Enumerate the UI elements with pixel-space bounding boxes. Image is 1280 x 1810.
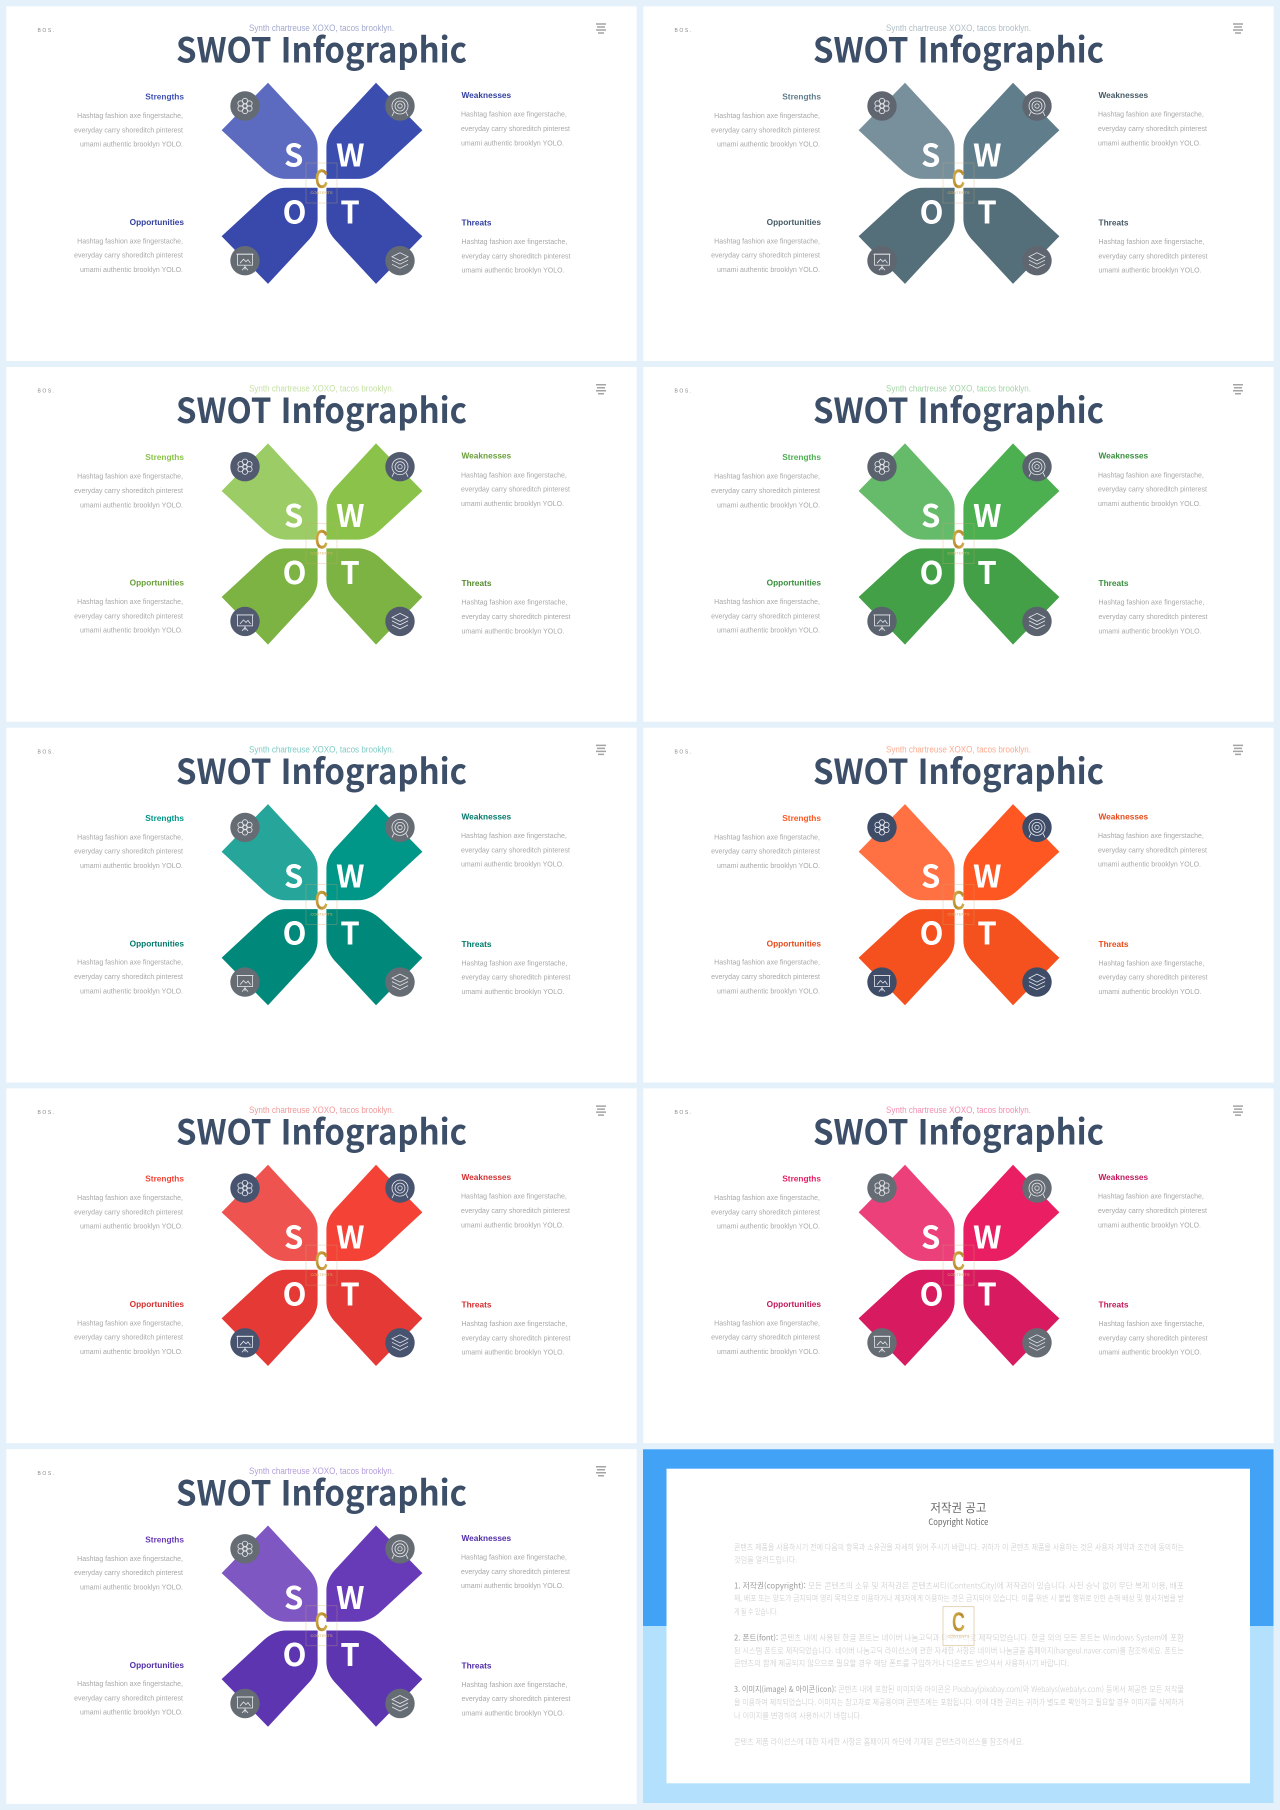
panel: light green SWOT slide: Weaknesses [462,451,512,461]
panel: indigo SWOT slide: CONTENTS [310,190,333,195]
panel: orange SWOT slide: everyday carry shoreditch pinterest [1098,975,1207,982]
panel: blue-grey SWOT slide [643,6,1274,361]
panel: copyright notice: 을 이용하여 제작되었습니다. 이미지는 참고자료 제공용이며 콘텐츠에는 포함됩니다. 이에 대한 권리는 귀하가 별도로 확인하고 필요할 경우 이미지를 삭제하거 [734,1697,1184,1708]
panel: pink SWOT slide: T [977,1269,997,1314]
panel: teal SWOT slide: SWOT Infographic [176,744,467,794]
panel: blue-grey SWOT slide: Hashtag fashion axe fingerstache, [1098,112,1204,119]
panel: blue-grey SWOT slide: T [977,187,997,232]
panel: green SWOT slide: Hashtag fashion axe fingerstache, [714,474,820,481]
panel: light green SWOT slide: Hashtag fashion axe fingerstache, [461,472,567,479]
panel: purple SWOT slide: C [315,1607,328,1637]
panel: orange SWOT slide: T [977,909,997,954]
panel: blue-grey SWOT slide: umami authentic brooklyn YOLO. [717,267,820,274]
panel: indigo SWOT slide: umami authentic brooklyn YOLO. [80,267,183,274]
panel: light green SWOT slide: everyday carry shoreditch pinterest [74,488,183,495]
panel: indigo SWOT slide: Synth chartreuse XOXO, tacos brooklyn. [249,23,394,33]
panel: teal SWOT slide: umami authentic brooklyn YOLO. [80,988,183,995]
panel: indigo SWOT slide: SWOT Infographic [176,22,467,72]
panel: indigo SWOT slide: umami authentic brooklyn YOLO. [462,268,565,275]
panel: orange SWOT slide [643,728,1274,1082]
panel: light green SWOT slide: Threats [462,578,492,588]
panel: red SWOT slide: everyday carry shoreditch pinterest [462,1335,570,1342]
panel: light green SWOT slide: everyday carry shoreditch pinterest [74,613,183,620]
panel: green SWOT slide: umami authentic brooklyn YOLO. [717,502,820,509]
panel: teal SWOT slide: umami authentic brooklyn YOLO. [461,862,564,869]
panel: teal SWOT slide: CONTENTS [310,911,333,916]
panel: red SWOT slide: S [284,1212,303,1257]
panel: indigo SWOT slide: umami authentic brooklyn YOLO. [461,140,564,147]
panel: indigo SWOT slide: T [340,187,360,232]
panel: pink SWOT slide: Synth chartreuse XOXO, tacos brooklyn. [886,1105,1031,1115]
panel: red SWOT slide: everyday carry shoreditch pinterest [461,1208,570,1215]
panel: pink SWOT slide: BOS. [674,1110,693,1116]
panel: purple SWOT slide: Strengths [145,1534,184,1544]
panel: green SWOT slide: S [921,491,940,536]
panel: red SWOT slide [6,1088,637,1443]
panel: blue-grey SWOT slide: Synth chartreuse XOXO, tacos brooklyn. [886,23,1031,33]
panel: green SWOT slide: umami authentic brooklyn YOLO. [1098,501,1201,508]
panel: green SWOT slide: W [973,491,1001,536]
panel: red SWOT slide: BOS. [38,1110,56,1116]
panel: teal SWOT slide: everyday carry shoreditch pinterest [462,975,570,982]
panel: pink SWOT slide: Opportunities [767,1299,821,1309]
panel: purple SWOT slide [6,1449,637,1804]
panel: green SWOT slide: Hashtag fashion axe fingerstache, [1098,472,1204,479]
panel: blue-grey SWOT slide: umami authentic brooklyn YOLO. [1098,140,1201,147]
panel: indigo SWOT slide: Threats [462,218,492,228]
panel: green SWOT slide [643,367,1274,722]
panel: pink SWOT slide: umami authentic brooklyn YOLO. [1098,1222,1201,1229]
panel: pink SWOT slide: C [952,1246,965,1276]
panel: pink SWOT slide: everyday carry shoreditch pinterest [1098,1335,1207,1342]
panel: indigo SWOT slide: everyday carry shoreditch pinterest [462,253,570,260]
panel: copyright notice: 콘텐츠의 함께 제공되지 않으므로 필요할 경우 해당 폰트를 구입하거나 다운로드 받으셔서 사용하시기 바랍니다. [734,1658,1069,1669]
panel: orange SWOT slide: umami authentic brooklyn YOLO. [717,988,820,995]
panel: green SWOT slide: everyday carry shoreditch pinterest [711,613,820,620]
panel: blue-grey SWOT slide: Hashtag fashion axe fingerstache, [1098,239,1204,246]
panel: copyright notice: 것임을 알려드립니다. [734,1555,797,1566]
panel: purple SWOT slide: umami authentic brooklyn YOLO. [80,1710,183,1717]
panel: orange SWOT slide: umami authentic brooklyn YOLO. [1098,862,1201,869]
panel: green SWOT slide: Opportunities [767,578,821,588]
panel: copyright notice: 게 될 수 있습니다. [734,1606,778,1617]
panel: blue-grey SWOT slide: Opportunities [767,217,821,227]
panel: copyright notice: 콘텐츠 제품 라이선스에 대한 자세한 사항은 홈페이지 하단에 기재된 콘텐츠라이선스를 참조하세요. [734,1736,1024,1747]
panel: copyright notice: 된 시스템 폰트로 제작되었습니다. 네이버 나눔고딕 라이선스에 관한 자세한 사항은 네이버 나눔글꼴 홈페이지(hangeul.naver.com)를 참조하세요. 폰트는 [734,1645,1184,1656]
panel: indigo SWOT slide: Opportunities [130,217,184,227]
panel: light green SWOT slide: Hashtag fashion axe fingerstache, [462,600,567,607]
panel: teal SWOT slide: Synth chartreuse XOXO, tacos brooklyn. [249,744,394,754]
panel: orange SWOT slide: Opportunities [767,938,821,948]
panel: teal SWOT slide: umami authentic brooklyn YOLO. [80,863,183,870]
panel: blue-grey SWOT slide: Hashtag fashion axe fingerstache, [714,113,820,120]
panel: teal SWOT slide: O [283,909,306,954]
panel: purple SWOT slide: umami authentic brooklyn YOLO. [462,1710,565,1717]
panel: green SWOT slide: SWOT Infographic [813,383,1104,433]
panel: pink SWOT slide: Hashtag fashion axe fingerstache, [714,1195,820,1202]
panel: red SWOT slide: umami authentic brooklyn YOLO. [461,1222,564,1229]
panel: pink SWOT slide: SWOT Infographic [813,1105,1104,1155]
panel: indigo SWOT slide: Hashtag fashion axe fingerstache, [461,112,567,119]
panel: teal SWOT slide: Hashtag fashion axe fingerstache, [77,834,183,841]
panel: blue-grey SWOT slide: Threats [1098,218,1129,228]
panel: green SWOT slide: everyday carry shoreditch pinterest [1098,614,1207,621]
panel: indigo SWOT slide: Weaknesses [462,90,512,100]
panel: green SWOT slide: everyday carry shoreditch pinterest [711,488,820,495]
panel: blue-grey SWOT slide: BOS. [674,28,693,34]
panel: indigo SWOT slide: C [315,164,328,194]
panel: light green SWOT slide: Opportunities [130,578,184,588]
panel: purple SWOT slide: T [340,1630,360,1675]
panel: pink SWOT slide: umami authentic brooklyn YOLO. [717,1349,820,1356]
panel: purple SWOT slide: Weaknesses [462,1533,512,1543]
panel: purple SWOT slide: S [284,1573,303,1618]
panel: pink SWOT slide: everyday carry shoreditch pinterest [1098,1208,1207,1215]
panel: teal SWOT slide: Hashtag fashion axe fingerstache, [461,833,567,840]
panel: copyright notice: C [952,1607,965,1637]
panel: pink SWOT slide: Hashtag fashion axe fingerstache, [1098,1321,1204,1328]
panel: teal SWOT slide: C [315,885,328,915]
panel: pink SWOT slide: Threats [1098,1300,1129,1310]
panel: teal SWOT slide: S [284,852,303,897]
panel: green SWOT slide: C [952,525,965,555]
panel: teal SWOT slide: everyday carry shoreditch pinterest [74,974,183,981]
panel: orange SWOT slide: everyday carry shoreditch pinterest [711,974,820,981]
panel: pink SWOT slide: Weaknesses [1098,1172,1149,1182]
panel: copyright notice: CONTENTS [948,1634,970,1638]
panel: orange SWOT slide: SWOT Infographic [813,744,1104,794]
panel: red SWOT slide: T [340,1269,360,1314]
panel: light green SWOT slide: umami authentic brooklyn YOLO. [80,628,183,635]
panel: red SWOT slide: Hashtag fashion axe fingerstache, [77,1320,183,1327]
panel: purple SWOT slide: Threats [462,1660,492,1670]
panel: orange SWOT slide: S [921,852,940,897]
panel: teal SWOT slide: Hashtag fashion axe fingerstache, [462,960,567,967]
panel: blue-grey SWOT slide: Weaknesses [1098,90,1149,100]
panel: indigo SWOT slide: W [336,130,364,175]
panel: light green SWOT slide: Hashtag fashion axe fingerstache, [77,474,183,481]
panel: teal SWOT slide: Strengths [145,813,184,823]
panel: orange SWOT slide: W [973,852,1001,897]
panel: red SWOT slide: umami authentic brooklyn YOLO. [462,1350,565,1357]
panel: pink SWOT slide: everyday carry shoreditch pinterest [711,1209,820,1216]
panel: light green SWOT slide: T [340,548,360,593]
panel: red SWOT slide: SWOT Infographic [176,1105,467,1155]
panel: blue-grey SWOT slide: W [973,130,1001,175]
panel: orange SWOT slide: everyday carry shoreditch pinterest [711,849,820,856]
panel: green SWOT slide: everyday carry shoreditch pinterest [1098,487,1207,494]
panel: light green SWOT slide: BOS. [38,389,56,395]
panel: indigo SWOT slide: everyday carry shoreditch pinterest [461,126,570,133]
panel: light green SWOT slide: everyday carry shoreditch pinterest [462,614,570,621]
panel: light green SWOT slide: CONTENTS [310,551,333,556]
panel: orange SWOT slide: CONTENTS [948,911,970,916]
panel: teal SWOT slide: everyday carry shoreditch pinterest [74,849,183,856]
panel: purple SWOT slide: everyday carry shoreditch pinterest [74,1695,183,1702]
panel: blue-grey SWOT slide: SWOT Infographic [813,22,1104,72]
panel: teal SWOT slide [6,728,637,1082]
panel: green SWOT slide: Weaknesses [1098,451,1149,461]
panel: indigo SWOT slide: BOS. [38,28,56,34]
panel: red SWOT slide: CONTENTS [310,1272,333,1277]
panel: copyright notice: 1. 저작권(copyright): 모든 콘텐츠의 소유 및 저작권은 콘텐츠씨티(ContentsCity)에 저작권이 있습니다. 사전 승낙 없이 무단 복제 이용, 배포 [734,1580,1184,1591]
panel: indigo SWOT slide: Hashtag fashion axe fingerstache, [77,113,183,120]
panel: orange SWOT slide: Threats [1098,939,1129,949]
panel: purple SWOT slide: everyday carry shoreditch pinterest [462,1696,570,1703]
panel: pink SWOT slide: Strengths [782,1174,821,1184]
panel: teal SWOT slide: everyday carry shoreditch pinterest [461,847,570,854]
panel: copyright notice: 3. 이미지(image) & 아이콘(icon): 콘텐츠 내에 포함된 이미지와 아이콘은 Pixabay(pixabay.com)와 Webalys(webalys.com) 등에서 제공한 모든 저작물 [734,1684,1184,1695]
panel: green SWOT slide: umami authentic brooklyn YOLO. [717,628,820,635]
panel: purple SWOT slide: CONTENTS [310,1633,333,1638]
panel: red SWOT slide: everyday carry shoreditch pinterest [74,1335,183,1342]
panel: light green SWOT slide: O [283,548,306,593]
panel: red SWOT slide: Strengths [145,1174,184,1184]
panel: green SWOT slide: Strengths [782,452,821,462]
panel: teal SWOT slide: BOS. [38,749,56,755]
panel: purple SWOT slide: O [283,1630,306,1675]
panel: copyright notice [643,1449,1274,1803]
panel: light green SWOT slide: umami authentic brooklyn YOLO. [462,628,565,635]
panel: red SWOT slide: Hashtag fashion axe fingerstache, [461,1194,567,1201]
panel: orange SWOT slide: Hashtag fashion axe fingerstache, [1098,960,1204,967]
panel: purple SWOT slide: everyday carry shoreditch pinterest [74,1570,183,1577]
panel: orange SWOT slide: BOS. [674,749,693,755]
panel: indigo SWOT slide: everyday carry shoreditch pinterest [74,253,183,260]
panel: copyright notice: 나 이미지를 변경하여 사용하시기 바랍니다. [734,1710,862,1721]
panel: pink SWOT slide: Hashtag fashion axe fingerstache, [714,1320,820,1327]
panel: orange SWOT slide: Strengths [782,813,821,823]
panel: indigo SWOT slide: S [284,130,303,175]
panel: green SWOT slide: Hashtag fashion axe fingerstache, [714,599,820,606]
panel: orange SWOT slide: umami authentic brooklyn YOLO. [1098,989,1202,996]
panel: orange SWOT slide: O [920,909,943,954]
panel: light green SWOT slide: C [315,525,328,555]
panel: blue-grey SWOT slide: everyday carry shoreditch pinterest [711,253,820,260]
panel: blue-grey SWOT slide: Hashtag fashion axe fingerstache, [714,238,820,245]
panel: light green SWOT slide: everyday carry shoreditch pinterest [461,487,570,494]
panel: blue-grey SWOT slide: O [920,187,943,232]
panel: blue-grey SWOT slide: everyday carry shoreditch pinterest [1098,126,1207,133]
panel: indigo SWOT slide: Hashtag fashion axe fingerstache, [77,238,183,245]
panel: teal SWOT slide: Threats [462,939,492,949]
panel: blue-grey SWOT slide: Strengths [782,92,821,102]
panel: purple SWOT slide: Opportunities [130,1660,184,1670]
panel: red SWOT slide: Synth chartreuse XOXO, tacos brooklyn. [249,1105,394,1115]
panel: light green SWOT slide: S [284,491,303,536]
panel: orange SWOT slide: C [952,885,965,915]
panel: copyright notice: Copyright Notice [928,1516,989,1528]
panel: orange SWOT slide: Weaknesses [1098,811,1149,821]
panel: light green SWOT slide: Hashtag fashion axe fingerstache, [77,599,183,606]
panel: light green SWOT slide: SWOT Infographic [176,383,467,433]
panel: light green SWOT slide: umami authentic brooklyn YOLO. [461,501,564,508]
panel: purple SWOT slide: SWOT Infographic [176,1465,467,1515]
panel: purple SWOT slide: Hashtag fashion axe fingerstache, [462,1682,567,1689]
panel: copyright notice: 2. 폰트(font): 콘텐츠 내에 사용된 한글 폰트는 네이버 나눔고딕과 마루부리로 제작되었습니다. 한글 외의 모든 폰트는 Windows System에 포함 [734,1632,1184,1643]
panel: orange SWOT slide: Synth chartreuse XOXO, tacos brooklyn. [886,744,1031,754]
panel: red SWOT slide: umami authentic brooklyn YOLO. [80,1349,183,1356]
panel: pink SWOT slide [643,1088,1274,1443]
panel: pink SWOT slide: umami authentic brooklyn YOLO. [717,1224,820,1231]
panel: light green SWOT slide: Strengths [145,452,184,462]
panel: copyright notice: 제, 배포 또는 양도가 금지되며 영리 목적으로 이용하거나 제3자에게 이용하는 것은 금지되어 있습니다. 이를 위반 시 불법 행위로 인한 손해 배상 및 형사처벌을 받 [734,1593,1184,1604]
panel: blue-grey SWOT slide: everyday carry shoreditch pinterest [1098,253,1207,260]
panel: red SWOT slide: Opportunities [130,1299,184,1309]
panel: purple SWOT slide: Synth chartreuse XOXO, tacos brooklyn. [249,1466,394,1476]
panel: teal SWOT slide: Opportunities [130,938,184,948]
panel: indigo SWOT slide: Hashtag fashion axe fingerstache, [462,239,567,246]
panel: green SWOT slide: O [920,548,943,593]
panel: pink SWOT slide: CONTENTS [948,1272,970,1277]
panel: light green SWOT slide: W [336,491,364,536]
panel: purple SWOT slide: W [336,1573,364,1618]
panel: orange SWOT slide: Hashtag fashion axe fingerstache, [714,960,820,967]
panel: blue-grey SWOT slide: C [952,164,965,194]
panel: purple SWOT slide: Hashtag fashion axe fingerstache, [77,1556,183,1563]
panel: pink SWOT slide: umami authentic brooklyn YOLO. [1098,1350,1202,1357]
panel: light green SWOT slide: umami authentic brooklyn YOLO. [80,502,183,509]
panel: orange SWOT slide: Hashtag fashion axe fingerstache, [1098,833,1204,840]
panel: indigo SWOT slide: umami authentic brooklyn YOLO. [80,142,183,149]
panel: teal SWOT slide: W [336,852,364,897]
panel: indigo SWOT slide: Strengths [145,92,184,102]
panel: purple SWOT slide: Hashtag fashion axe fingerstache, [77,1681,183,1688]
panel: green SWOT slide: Hashtag fashion axe fingerstache, [1098,600,1204,607]
panel: copyright notice: 콘텐츠 제품을 사용하시기 전에 다음의 항목과 소유권을 자세히 읽어 주시기 바랍니다. 귀하가 이 콘텐츠 제품을 사용하는 것은 사용자 계약과 조건에 동의하는 [734,1542,1184,1553]
panel: light green SWOT slide: Synth chartreuse XOXO, tacos brooklyn. [249,384,394,394]
panel: red SWOT slide: Threats [462,1300,492,1310]
panel: green SWOT slide: CONTENTS [948,551,970,556]
panel: purple SWOT slide: Hashtag fashion axe fingerstache, [461,1554,567,1561]
panel: red SWOT slide: Weaknesses [462,1172,512,1182]
panel: green SWOT slide: umami authentic brooklyn YOLO. [1098,628,1202,635]
panel: purple SWOT slide: everyday carry shoreditch pinterest [461,1569,570,1576]
panel: purple SWOT slide: umami authentic brooklyn YOLO. [461,1583,564,1590]
panel: red SWOT slide: everyday carry shoreditch pinterest [74,1209,183,1216]
panel: teal SWOT slide: umami authentic brooklyn YOLO. [462,989,565,996]
panel: red SWOT slide: Hashtag fashion axe fingerstache, [462,1321,567,1328]
panel: indigo SWOT slide: everyday carry shoreditch pinterest [74,127,183,134]
panel: blue-grey SWOT slide: CONTENTS [948,190,970,195]
panel: teal SWOT slide: Hashtag fashion axe fingerstache, [77,960,183,967]
panel: red SWOT slide: C [315,1246,328,1276]
panel: blue-grey SWOT slide: everyday carry shoreditch pinterest [711,127,820,134]
panel: indigo SWOT slide: O [283,187,306,232]
panel: orange SWOT slide: umami authentic brooklyn YOLO. [717,863,820,870]
panel: green SWOT slide: BOS. [674,389,693,395]
panel: red SWOT slide: umami authentic brooklyn YOLO. [80,1224,183,1231]
panel: pink SWOT slide: everyday carry shoreditch pinterest [711,1335,820,1342]
panel: pink SWOT slide: S [921,1212,940,1257]
panel: purple SWOT slide: umami authentic brooklyn YOLO. [80,1584,183,1591]
panel: orange SWOT slide: Hashtag fashion axe fingerstache, [714,834,820,841]
panel: pink SWOT slide: Hashtag fashion axe fingerstache, [1098,1194,1204,1201]
panel: purple SWOT slide: BOS. [38,1471,56,1477]
panel: teal SWOT slide: Weaknesses [462,811,512,821]
panel: light green SWOT slide [6,367,637,722]
panel: blue-grey SWOT slide: S [921,130,940,175]
panel: red SWOT slide: Hashtag fashion axe fingerstache, [77,1195,183,1202]
panel: red SWOT slide: O [283,1269,306,1314]
panel: orange SWOT slide: everyday carry shoreditch pinterest [1098,847,1207,854]
panel: indigo SWOT slide [6,6,637,361]
panel: blue-grey SWOT slide: umami authentic brooklyn YOLO. [717,142,820,149]
panel: pink SWOT slide: O [920,1269,943,1314]
panel: teal SWOT slide: T [340,909,360,954]
panel: copyright notice: 저작권 공고 [930,1499,986,1516]
panel: red SWOT slide: W [336,1212,364,1257]
panel: blue-grey SWOT slide: umami authentic brooklyn YOLO. [1098,268,1202,275]
panel: green SWOT slide: Threats [1098,578,1129,588]
panel: green SWOT slide: T [977,548,997,593]
panel: pink SWOT slide: W [973,1212,1001,1257]
panel: green SWOT slide: Synth chartreuse XOXO, tacos brooklyn. [886,384,1031,394]
